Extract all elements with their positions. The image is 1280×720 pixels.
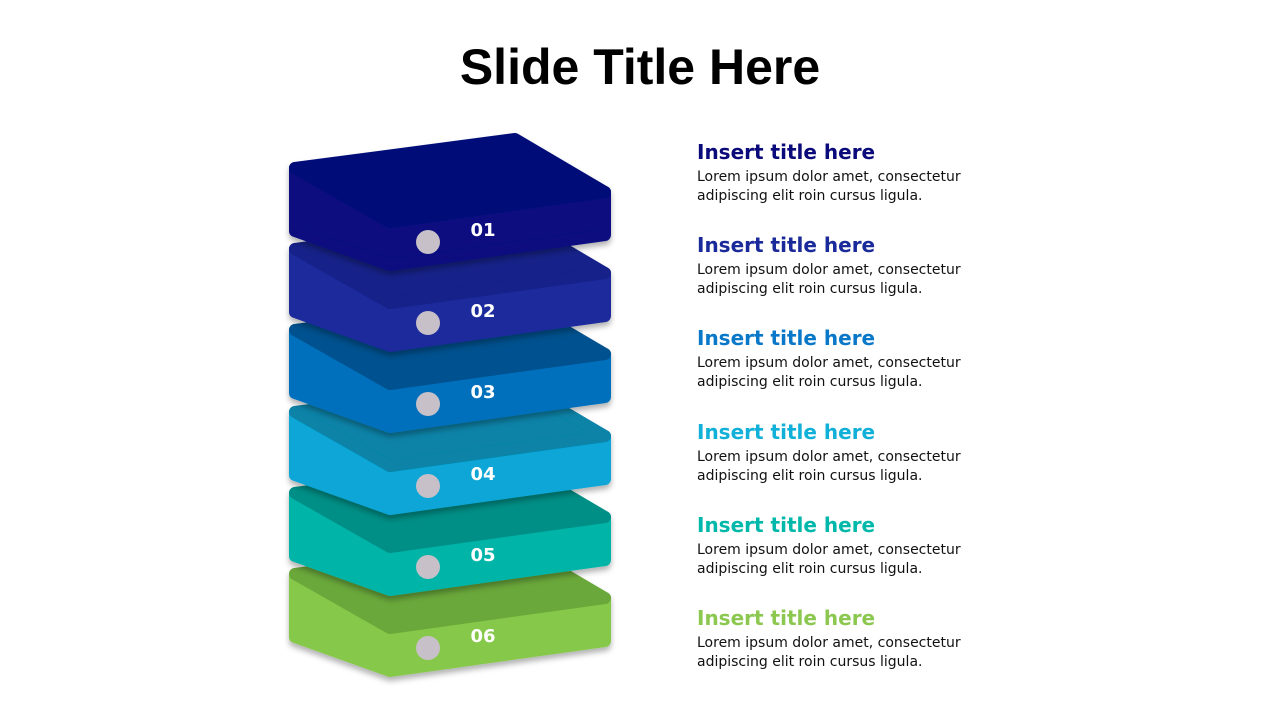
text block 5: Lorem ipsum dolor amet, consectetur	[697, 542, 961, 558]
layer 01	[295, 139, 605, 265]
text block 4: adipiscing elit roin cursus ligula.	[697, 468, 922, 484]
text block 5: Insert title here	[697, 513, 875, 537]
layer 02	[295, 220, 605, 346]
layer 03	[295, 301, 605, 427]
layer 03: 03	[470, 382, 496, 403]
text block 3	[697, 326, 961, 390]
text block 6: Insert title here	[697, 606, 875, 630]
text block 6	[697, 606, 961, 670]
layer 01: 01	[470, 220, 496, 241]
text block 3: adipiscing elit roin cursus ligula.	[697, 374, 922, 390]
layer 05	[295, 464, 605, 590]
layer 04: 04	[470, 464, 496, 485]
text block 1: Insert title here	[697, 140, 875, 164]
text block 2: adipiscing elit roin cursus ligula.	[697, 281, 922, 297]
text block 1	[697, 140, 961, 204]
text block 4	[697, 420, 961, 484]
layer 05: 05	[470, 545, 496, 566]
title: Slide Title Here	[460, 39, 820, 95]
text block 1: adipiscing elit roin cursus ligula.	[697, 188, 922, 204]
layer 02: 02	[470, 301, 496, 322]
text block 1: Lorem ipsum dolor amet, consectetur	[697, 169, 961, 185]
text block 2: Insert title here	[697, 233, 875, 257]
text block 3: Lorem ipsum dolor amet, consectetur	[697, 355, 961, 371]
text block 5: adipiscing elit roin cursus ligula.	[697, 561, 922, 577]
text block 3: Insert title here	[697, 326, 875, 350]
text block 5	[697, 513, 961, 577]
text block 4: Insert title here	[697, 420, 875, 444]
text block 2	[697, 233, 961, 297]
text block 4: Lorem ipsum dolor amet, consectetur	[697, 449, 961, 465]
layer 04	[295, 383, 605, 509]
text block 2: Lorem ipsum dolor amet, consectetur	[697, 262, 961, 278]
layer 06: 06	[470, 626, 496, 647]
layer 06	[295, 545, 605, 671]
text block 6: Lorem ipsum dolor amet, consectetur	[697, 635, 961, 651]
text block 6: adipiscing elit roin cursus ligula.	[697, 654, 922, 670]
